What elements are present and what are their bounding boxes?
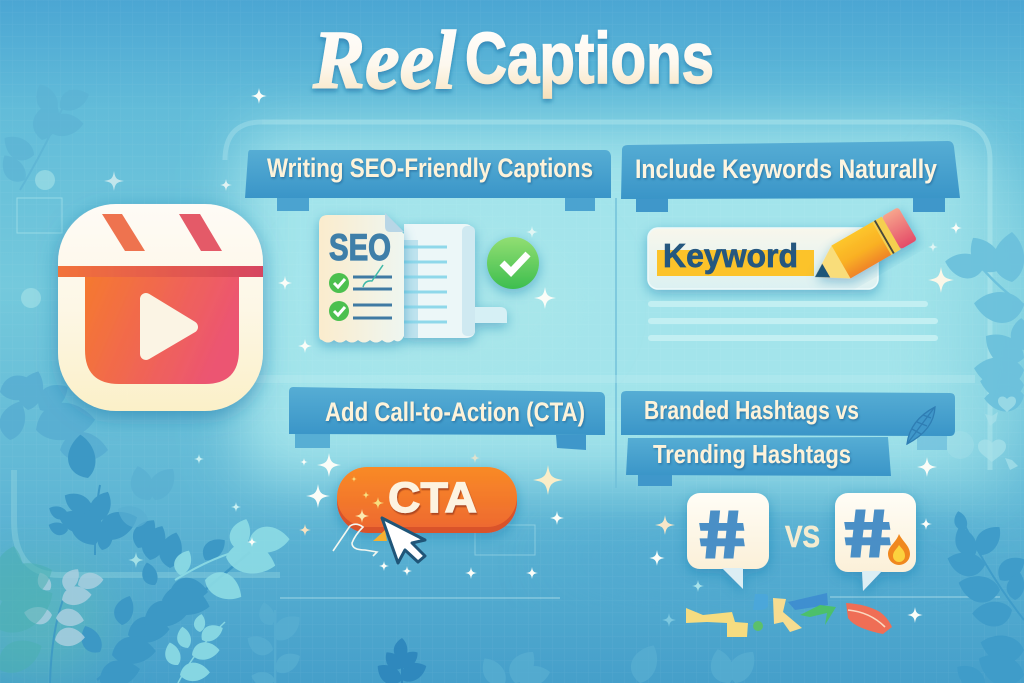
flame [888, 534, 910, 565]
front SEO page [319, 213, 404, 342]
decorative leaves: top left [0, 80, 92, 190]
CTA label: CTA [388, 474, 477, 522]
play triangle [146, 299, 192, 354]
banner: Writing SEO-Friendly Captions [245, 150, 611, 211]
keyword field [648, 228, 878, 289]
banner: Branded Hashtags vs Trending Hashtags: Branded Hashtags vs [644, 395, 859, 425]
button sparkles [351, 476, 384, 523]
banner: Include Keywords Naturally [621, 141, 960, 212]
decorative leaves: far left lilac sprig [23, 565, 105, 683]
clapper band [58, 266, 263, 277]
vs label: VS [785, 519, 820, 554]
title word: Captions: Captions [465, 19, 714, 99]
back page lines [404, 247, 447, 322]
banner: Include Keywords Naturally: Include Keywords Naturally [635, 154, 937, 184]
cursor arrow [382, 518, 425, 563]
decorative leaves: bottom centre dark sprig [373, 638, 430, 683]
icon: feather on banner [907, 407, 935, 444]
SEO heading: SEO [329, 227, 391, 268]
illustration: CTA button and cursor [333, 467, 517, 563]
branded hash symbol: # [694, 498, 750, 572]
decorative leaves: left under icon [0, 367, 108, 462]
back scroll page [404, 224, 507, 338]
inner red body [85, 277, 239, 384]
text lines [651, 304, 935, 338]
title word: Reel: Reel [312, 14, 457, 107]
banner: Branded Hashtags vs Trending Hashtags [621, 391, 955, 486]
trending hashtag bubble [835, 493, 916, 591]
banner: Add Call-to-Action (CTA) [289, 387, 605, 450]
CTA button [337, 467, 517, 533]
trending hash symbol: # [839, 497, 896, 571]
clapper slash right [179, 214, 222, 251]
decorative leaves: bottom left main branch [47, 433, 250, 683]
highlight [657, 250, 814, 276]
reels app icon [58, 204, 263, 411]
decorative leaves: bottom right [945, 510, 1024, 683]
banner: Add Call-to-Action (CTA): Add Call-to-Action (CTA) [325, 397, 585, 427]
illustration: SEO document [319, 213, 539, 342]
decorative leaves: bottom middle [114, 462, 761, 683]
decorative hearts: right side [946, 397, 1018, 470]
branded hashtag bubble [687, 493, 769, 589]
yellow arrow fragment [373, 530, 387, 541]
banner: Writing SEO-Friendly Captions: Writing SEO-Friendly Captions [267, 153, 593, 183]
confetti ribbons [686, 593, 892, 637]
green check badge [487, 237, 539, 289]
sparkles [104, 88, 962, 627]
decorative leaves: far left teal patch [0, 545, 61, 680]
decorative leaves: right side [944, 231, 1024, 413]
decorative leaves: light sprigs [161, 516, 291, 683]
clapper slash left [102, 214, 145, 251]
pencil [806, 207, 917, 293]
illustration: keyword field and pencil [648, 207, 935, 338]
banner: Branded Hashtags vs Trending Hashtags: Trending Hashtags [653, 439, 851, 469]
keyword text: Keyword [663, 237, 798, 274]
checklist [329, 265, 392, 321]
outline squiggle [333, 524, 377, 556]
illustration: hashtag comparison [686, 493, 916, 637]
